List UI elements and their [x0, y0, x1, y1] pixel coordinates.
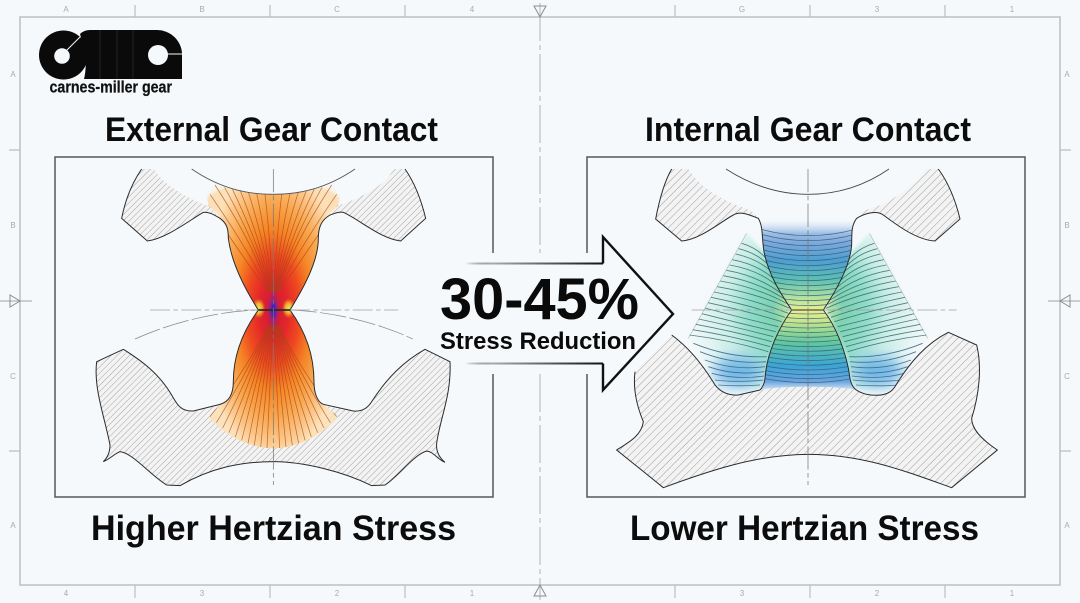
- stress field: low stress centre: [761, 222, 854, 390]
- caption: lower hertzian stress: Lower Hertzian Stress: [630, 509, 979, 548]
- logo: carnes-miller gear: carnes-miller gear: [50, 78, 172, 96]
- stress wing field left and right: [688, 233, 928, 392]
- frame reference letters: A: [10, 521, 16, 530]
- frame reference letters: B: [199, 5, 205, 14]
- frame reference letters: 4: [470, 5, 475, 14]
- logo: carnes-miller gear: [39, 30, 182, 96]
- panel outlines: [55, 157, 1025, 497]
- bottom gear: [617, 332, 997, 488]
- frame reference letters: 3: [200, 589, 205, 598]
- frame reference letters: 3: [740, 589, 745, 598]
- top gear left tooth: [122, 169, 220, 241]
- frame reference letters: A: [10, 70, 16, 79]
- gear outlines: [96, 169, 450, 486]
- frame reference letters: C: [1064, 372, 1070, 381]
- frame reference letters: 2: [875, 589, 880, 598]
- top gear teeth: [656, 169, 960, 241]
- frame reference letters: 2: [335, 589, 340, 598]
- top gear right tooth: [330, 169, 426, 241]
- frame reference letters: A: [63, 5, 69, 14]
- caption: higher hertzian stress: Higher Hertzian Stress: [91, 509, 456, 548]
- gear outlines: [617, 169, 997, 488]
- frame reference letters: C: [334, 5, 340, 14]
- callout: 30-45%: 30-45%: [440, 267, 639, 332]
- stress field: high stress fan: [192, 168, 355, 452]
- bottom gear: [96, 349, 450, 486]
- frame reference letters: B: [10, 221, 16, 230]
- frame reference letters: 1: [470, 589, 475, 598]
- frame reference letters: A: [1064, 70, 1070, 79]
- heading: external gear contact: External Gear Contact: [105, 111, 438, 149]
- frame reference letters: G: [739, 5, 745, 14]
- frame reference letters: 1: [1010, 5, 1015, 14]
- frame reference letters: 1: [1010, 589, 1015, 598]
- frame reference letters: 3: [875, 5, 880, 14]
- arrow: stress reduction: [465, 237, 673, 390]
- panel: external gear contact diagram: [96, 168, 450, 486]
- frame reference letters: C: [10, 372, 16, 381]
- frame reference letters: B: [1064, 221, 1070, 230]
- callout: stress reduction label: Stress Reduction: [440, 328, 636, 355]
- frame reference letters: 4: [64, 589, 69, 598]
- heading: internal gear contact: Internal Gear Contact: [645, 111, 971, 149]
- frame reference letters: A: [1064, 521, 1070, 530]
- panel: internal gear contact diagram: [617, 169, 997, 488]
